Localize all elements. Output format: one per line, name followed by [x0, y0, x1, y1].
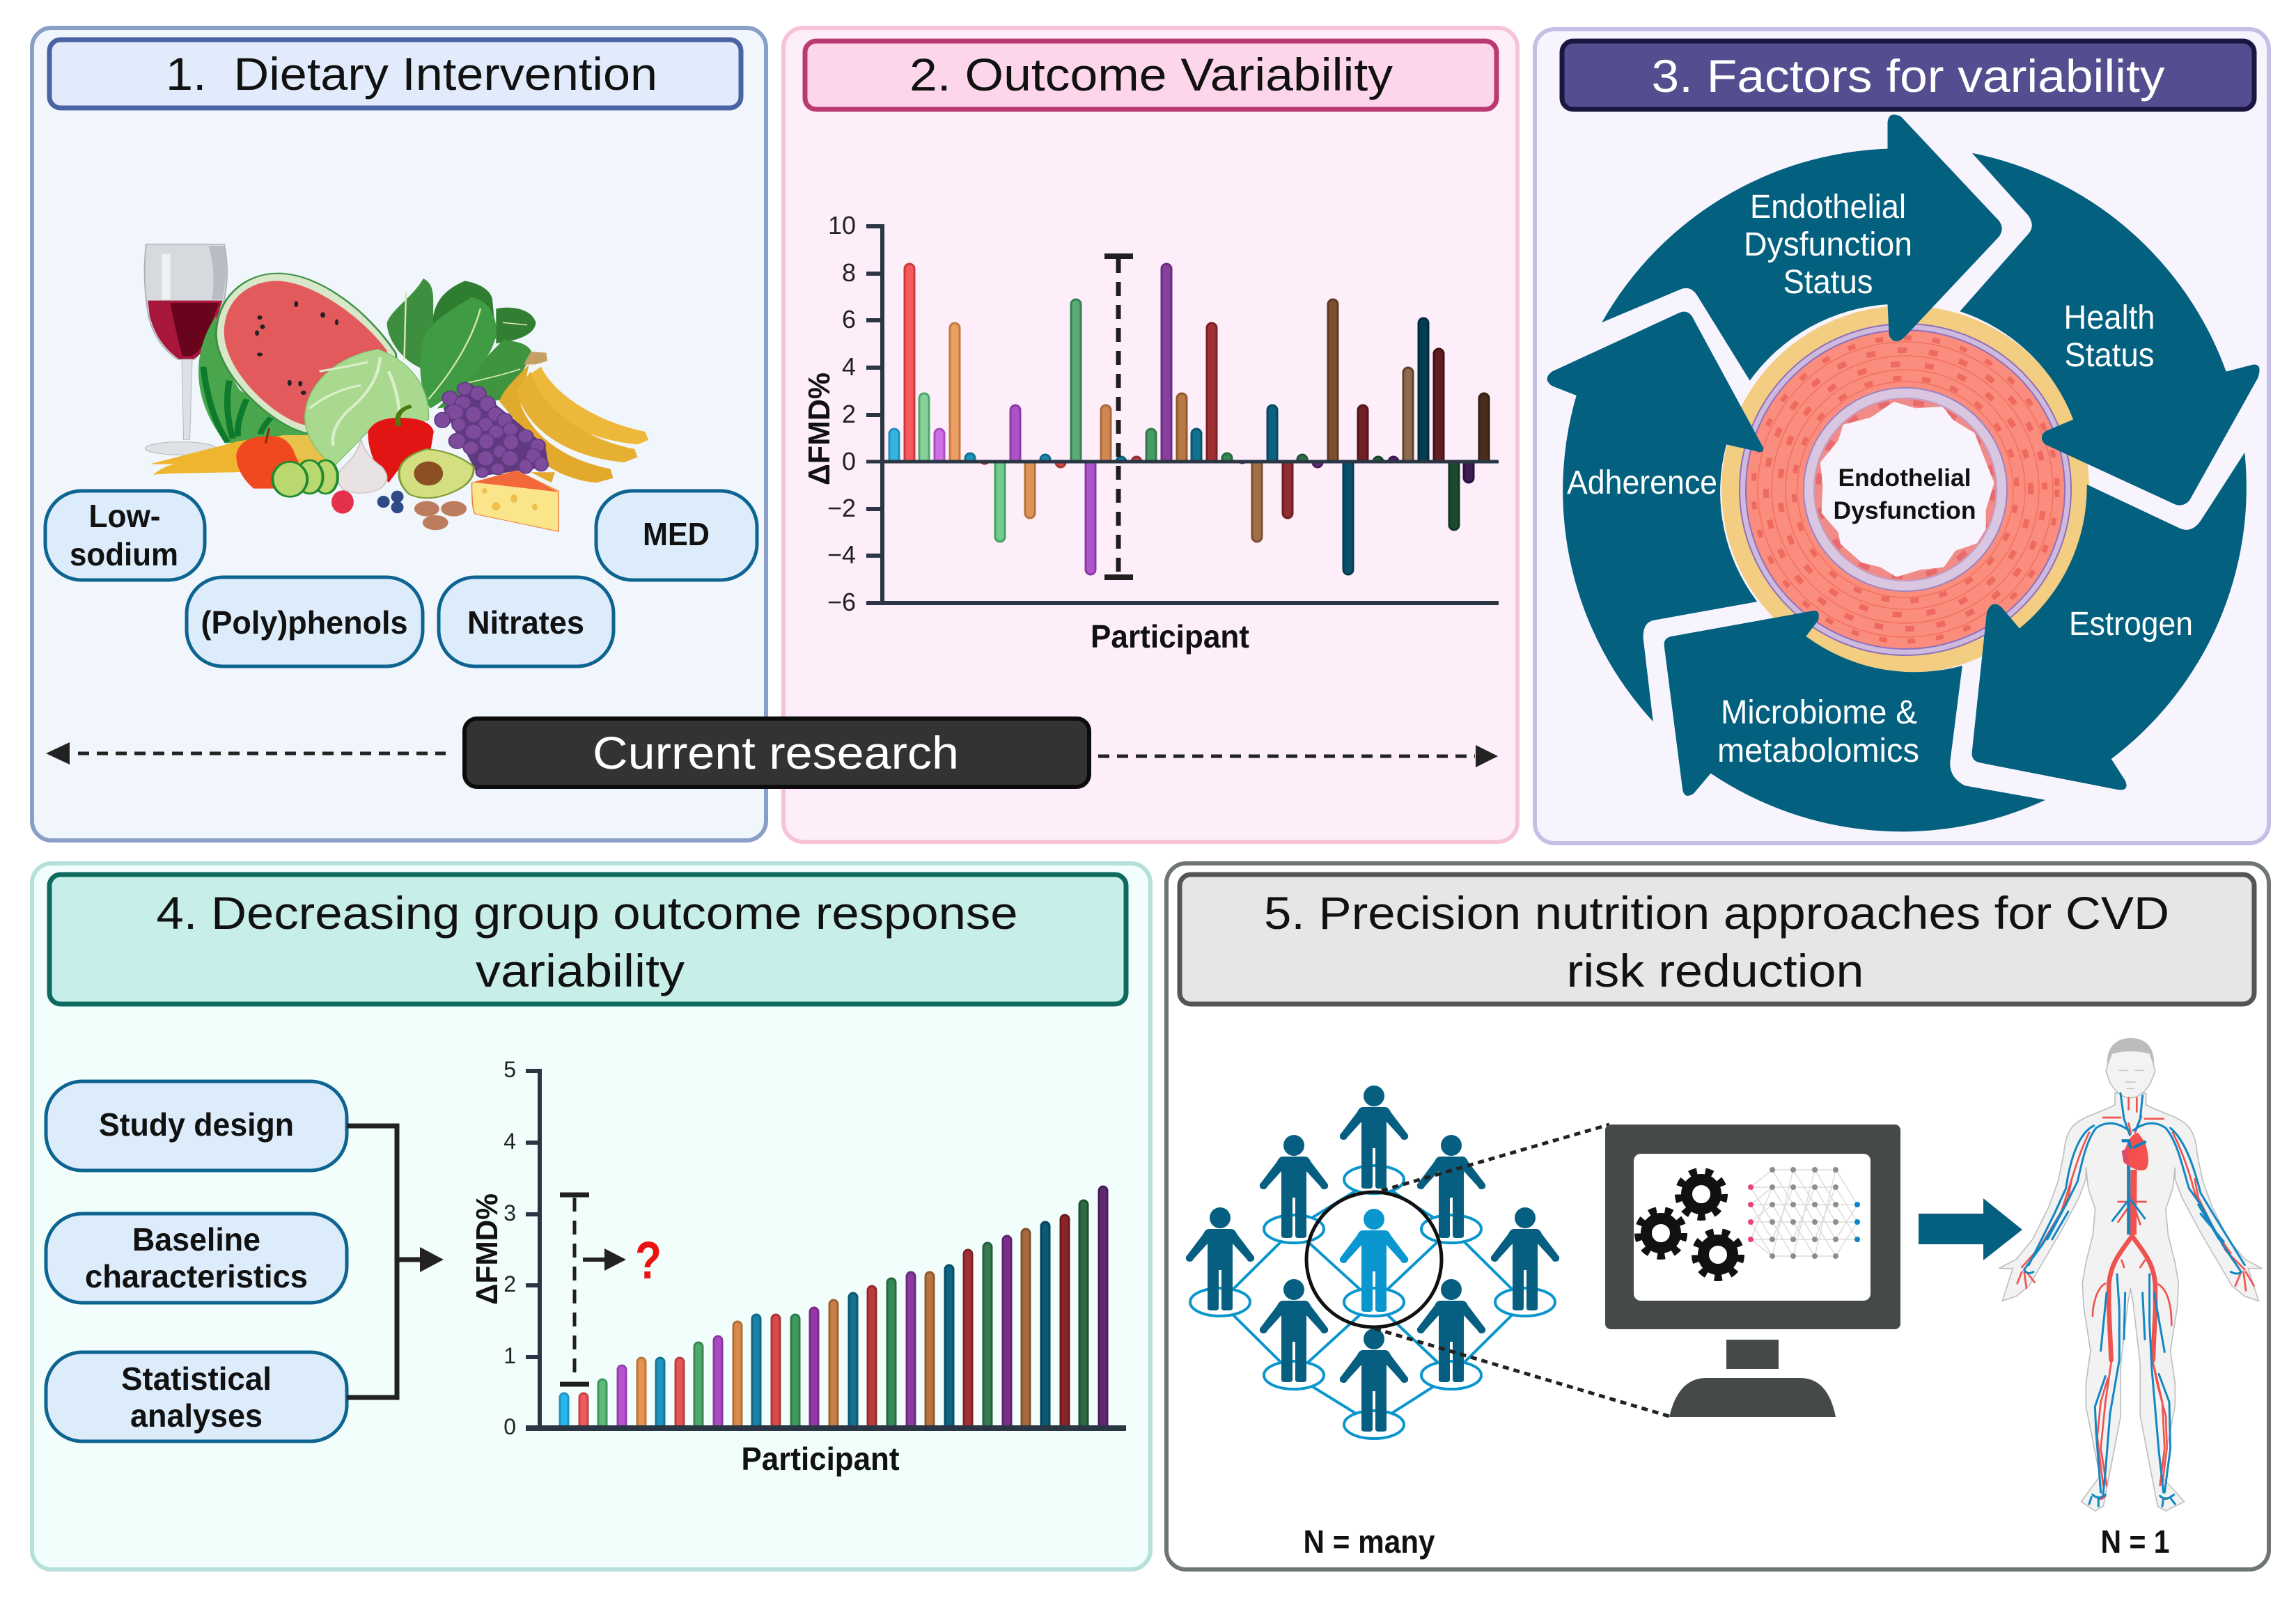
- question mark: ?: [635, 1231, 662, 1290]
- y axis tick labels: [827, 211, 856, 616]
- icon: raspberry: [331, 490, 354, 514]
- label: microbiome and metabolomics: [1717, 694, 1919, 769]
- label: adherence: Adherence: [1567, 464, 1717, 501]
- pill: MED: MED: [643, 516, 710, 552]
- icon: healthy food group: [145, 244, 648, 531]
- arrow: to question: [583, 1248, 626, 1271]
- arrow: right dashed: [1098, 745, 1498, 767]
- zoom lines: [1375, 1125, 1669, 1416]
- cycle arrows: [1547, 115, 2260, 831]
- label: endothelial dysfunction status: Dysfunction: [1744, 226, 1912, 263]
- y axis tick labels: 0: [842, 447, 856, 476]
- icon: wine glass: [145, 244, 227, 455]
- y axis title: ΔFMD%: [802, 373, 836, 485]
- icon: garlic: [338, 439, 387, 493]
- pill: baseline characteristics: [46, 1214, 347, 1303]
- label: health status: Health: [2064, 299, 2155, 336]
- panel: 1. dietary intervention: [32, 28, 766, 840]
- y axis tick labels: 4: [842, 352, 856, 381]
- pill: study design: [46, 1081, 347, 1170]
- bar chart: individual change in FMD: [802, 211, 1499, 655]
- banner: current research: Current research: [593, 727, 959, 778]
- heading: decreasing group outcome response variability: [49, 875, 1126, 1004]
- y axis tick labels: 10: [828, 211, 856, 240]
- pill: statistical analyses: [46, 1352, 347, 1441]
- panel: 3. factors for variability: [1535, 29, 2269, 843]
- icon: apple: [236, 428, 299, 489]
- heading: dietary intervention: 1. Dietary Intervention: [166, 48, 657, 100]
- arrow: endothelial dysfunction status: [1602, 115, 2002, 381]
- head: [2106, 1039, 2155, 1098]
- y axis tick labels: [503, 1057, 516, 1439]
- arrow: microbiome and metabolomics: [1664, 611, 2045, 831]
- diagram: population network: [1186, 1086, 1559, 1439]
- label: endothelial dysfunction status: Endothelial: [1750, 189, 1906, 226]
- label: endothelial dysfunction: Dysfunction: [1833, 497, 1976, 524]
- people: [1186, 1086, 1559, 1432]
- y axis tick labels: −6: [827, 588, 856, 616]
- panel: 4. decreasing group outcome response variability: [32, 863, 1150, 1569]
- icon: heart: [2122, 1133, 2148, 1170]
- label: N = 1: N = 1: [2100, 1523, 2170, 1560]
- y axis tick labels: 5: [503, 1057, 516, 1082]
- label: endothelial dysfunction: [1833, 464, 1976, 524]
- arrow: adherence: [1547, 312, 1763, 721]
- y axis tick labels: 2: [503, 1271, 516, 1297]
- icon: leafy greens: [387, 279, 536, 409]
- icon: computer monitor: [1605, 1125, 1900, 1417]
- pill: polyphenols: [187, 577, 423, 666]
- heading: dietary intervention: [49, 40, 741, 108]
- vessels: [2017, 1093, 2254, 1506]
- icon: human circulatory system: [1999, 1039, 2262, 1511]
- label: endothelial dysfunction status: Status: [1783, 264, 1873, 301]
- y axis tick labels: 1: [503, 1343, 516, 1368]
- label: endothelial dysfunction: Endothelial: [1838, 464, 1971, 492]
- label: microbiome and metabolomics: metabolomics: [1717, 733, 1919, 769]
- pill: nitrates: Nitrates: [467, 604, 584, 641]
- icon: cucumber: [272, 460, 338, 496]
- vessel lumen: [1822, 404, 1992, 574]
- heading: decreasing group outcome response variability: 4. Decreasing group outcome response: [156, 887, 1018, 939]
- heading: factors for variability: [1562, 41, 2254, 109]
- arrow: bracket connector: [347, 1126, 444, 1397]
- negative bars: [981, 464, 1475, 575]
- label: health status: [2064, 299, 2155, 374]
- bar chart: reduced variability: [470, 1057, 1126, 1477]
- positive bars: [889, 263, 1490, 460]
- y axis tick labels: −4: [827, 540, 856, 569]
- pill: MED: [596, 491, 757, 580]
- icon: blueberries: [377, 491, 403, 513]
- sorted bars: [560, 1186, 1107, 1442]
- panel: 2. outcome variability: [783, 28, 1517, 842]
- icon: almonds: [414, 501, 467, 530]
- x axis title: Participant: [1091, 618, 1249, 655]
- pill: low-sodium: Low-: [89, 498, 160, 534]
- label: microbiome and metabolomics: Microbiome &: [1721, 694, 1917, 731]
- icon: grapes: [435, 382, 548, 478]
- pill: low-sodium: sodium: [70, 536, 178, 572]
- heading: precision nutrition approaches: risk reduction: [1567, 945, 1864, 996]
- pill: baseline characteristics: characteristics: [85, 1258, 308, 1294]
- pill: study design: Study design: [99, 1106, 294, 1143]
- diagram: artery cross-section: [1721, 306, 2089, 673]
- arrow: health status: [1960, 153, 2260, 506]
- icon: neural network: [1748, 1167, 1860, 1259]
- pill: nitrates: [439, 577, 614, 666]
- y axis tick labels: −2: [827, 494, 856, 522]
- banner: current research: [46, 719, 1498, 787]
- label: endothelial dysfunction status: [1744, 189, 1912, 301]
- pill: low-sodium: [45, 491, 205, 580]
- label: N = many: N = many: [1304, 1523, 1435, 1560]
- icon: cabbage: [305, 350, 428, 465]
- heading: factors for variability: 3. Factors for variability: [1652, 50, 2164, 102]
- y axis tick labels: 0: [503, 1414, 516, 1439]
- arrow: left dashed: [46, 742, 446, 765]
- heading: precision nutrition approaches: [1180, 875, 2254, 1004]
- arrow: estrogen: [1972, 453, 2247, 790]
- heading: precision nutrition approaches: 5. Precision nutrition approaches for CVD: [1264, 887, 2169, 939]
- y axis tick labels: 6: [842, 305, 856, 334]
- icon: watermelon: [198, 274, 396, 444]
- heading: decreasing group outcome response variability: variability: [476, 945, 685, 996]
- y axis title: ΔFMD%: [470, 1193, 504, 1305]
- range bracket: [560, 1195, 589, 1384]
- selected person: [1340, 1209, 1408, 1312]
- range bracket: [1104, 256, 1133, 577]
- y axis tick labels: 8: [842, 258, 856, 287]
- icon: gears: [1638, 1171, 1741, 1278]
- y axis tick labels: 3: [503, 1200, 516, 1225]
- arrow: to individual: [1919, 1198, 2022, 1260]
- y axis tick labels: 2: [842, 400, 856, 428]
- icon: bell pepper: [368, 406, 434, 483]
- heading: outcome variability: 2. Outcome Variability: [909, 49, 1393, 100]
- icon: carrots: [150, 435, 330, 475]
- icon: cheese: [472, 471, 559, 531]
- icon: bananas: [499, 352, 648, 483]
- x axis title: Participant: [741, 1441, 900, 1477]
- y axis tick labels: 4: [503, 1129, 516, 1154]
- pill: polyphenols: (Poly)phenols: [201, 604, 408, 641]
- icon: avocado: [399, 449, 474, 498]
- pill: statistical analyses: Statistical: [121, 1361, 272, 1397]
- label: health status: Status: [2064, 337, 2155, 374]
- axes: [866, 224, 1499, 605]
- heading: outcome variability: [805, 41, 1497, 109]
- pill: statistical analyses: analyses: [130, 1397, 263, 1434]
- axes: [526, 1069, 540, 1430]
- label: estrogen: Estrogen: [2069, 606, 2193, 643]
- panel: 5. precision nutrition approaches: [1166, 863, 2269, 1569]
- pill: baseline characteristics: Baseline: [132, 1221, 260, 1258]
